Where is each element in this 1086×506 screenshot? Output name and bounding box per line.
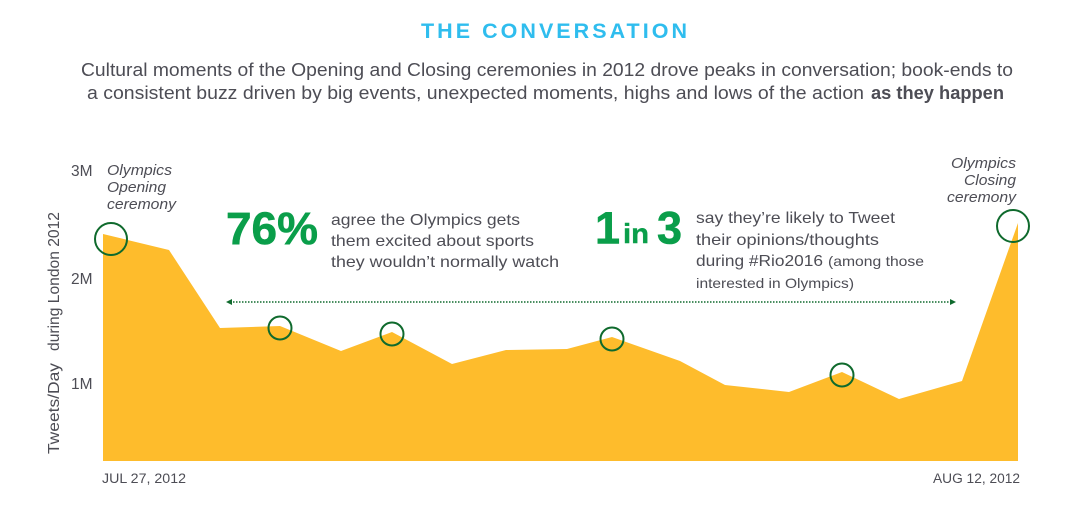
stat text: likely to tweet: during #Rio2016 xyxy=(696,253,823,270)
stat text: excited about sports: they wouldn’t normally watch xyxy=(331,254,559,271)
annotation: opening ceremony: Olympics xyxy=(107,163,172,179)
x axis labels xyxy=(102,471,1020,486)
area chart xyxy=(103,223,1018,461)
y axis title xyxy=(46,212,63,454)
stat text: likely to tweet: say they’re likely to Tweet xyxy=(696,210,896,227)
annotation: closing ceremony: ceremony xyxy=(947,190,1017,206)
annotation: opening ceremony xyxy=(107,163,177,213)
stat text: likely to tweet: (among those xyxy=(828,253,924,269)
stat text: excited about sports xyxy=(331,212,559,271)
x axis labels: AUG 12, 2012 xyxy=(933,471,1020,486)
y axis title: during London 2012 xyxy=(46,212,63,351)
stat text: excited about sports: agree the Olympics gets xyxy=(331,212,520,229)
y axis title: Tweets/Day xyxy=(46,363,63,454)
annotation: opening ceremony: ceremony xyxy=(107,197,177,213)
stat text: likely to tweet: interested in Olympics) xyxy=(696,275,854,291)
intro text: Cultural moments of the Opening and Closing ceremonies in 2012 drove peaks in conversation; book-ends to xyxy=(81,60,1013,80)
title: THE CONVERSATION xyxy=(421,19,687,43)
stat: 1 in 3: 3 xyxy=(657,202,682,254)
stat text: likely to tweet xyxy=(696,210,924,291)
intro text xyxy=(81,60,1013,103)
stat: 1 in 3 xyxy=(595,202,682,254)
y axis labels xyxy=(71,163,93,393)
annotation: closing ceremony: Closing xyxy=(964,173,1016,189)
peak markers xyxy=(95,210,1029,386)
y axis labels: 1M xyxy=(71,376,93,393)
annotation: opening ceremony: Opening xyxy=(107,180,166,196)
stat: 1 in 3: in xyxy=(623,218,649,249)
stat: 1 in 3: 1 xyxy=(595,202,620,254)
annotation: closing ceremony xyxy=(947,156,1017,206)
annotation: closing ceremony: Olympics xyxy=(951,156,1016,172)
intro text: as they happen xyxy=(871,83,1004,103)
x axis labels: JUL 27, 2012 xyxy=(102,471,186,486)
stat text: excited about sports: them excited about sports xyxy=(331,233,534,250)
stat: 76%: 76% xyxy=(226,203,318,254)
stat text: likely to tweet: their opinions/thoughts xyxy=(696,232,879,249)
double-headed arrow xyxy=(226,299,956,305)
y axis labels: 3M xyxy=(71,163,93,180)
intro text: a consistent buzz driven by big events, unexpected moments, highs and lows of the action xyxy=(87,83,864,103)
y axis labels: 2M xyxy=(71,271,93,288)
